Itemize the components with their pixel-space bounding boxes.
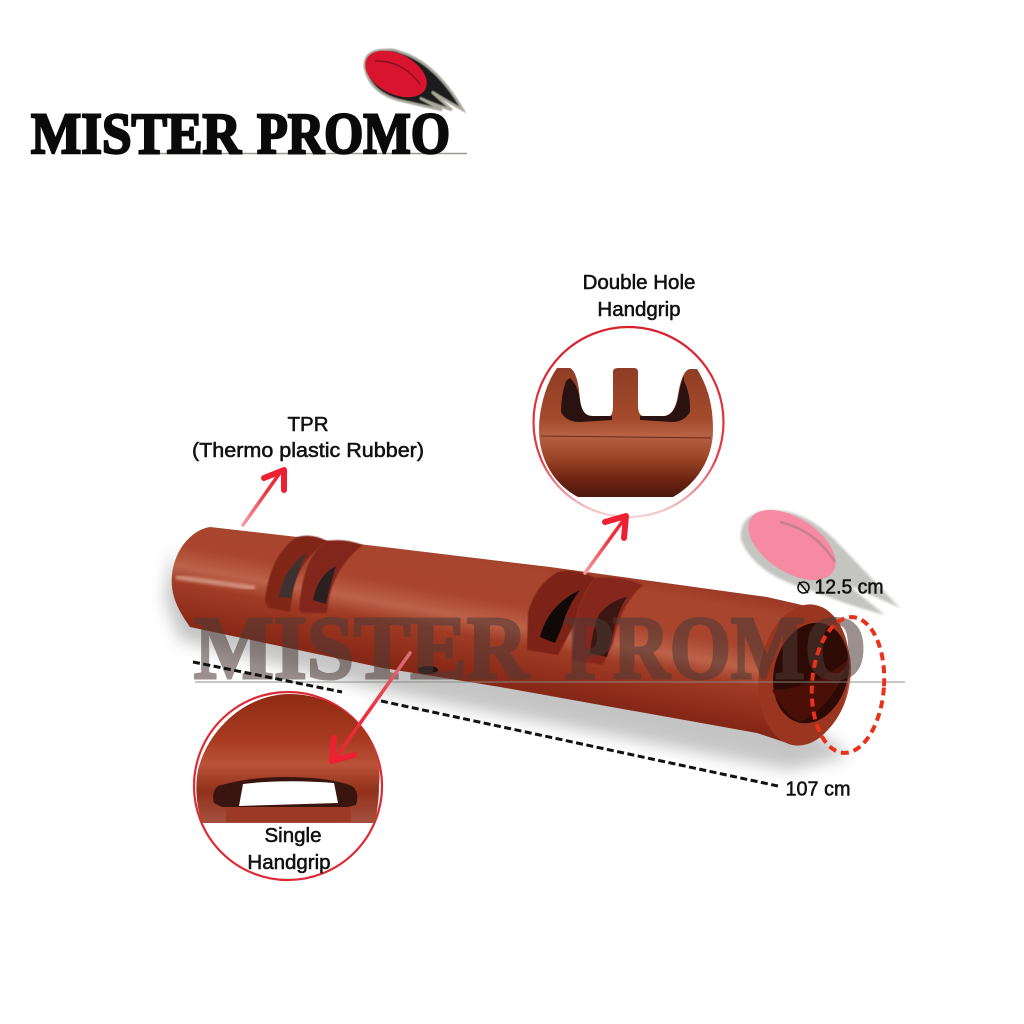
logo baseline <box>150 152 467 154</box>
label line 2: Handgrip <box>247 851 331 874</box>
hole shading left <box>561 378 612 422</box>
photo: single grip cut-out <box>196 694 380 823</box>
label line 2: (Thermo plastic Rubber) <box>192 439 424 462</box>
wordmark: Mister: MISTER <box>31 101 242 166</box>
tube shadow <box>165 550 850 770</box>
logo icon: red ball <box>358 41 463 110</box>
seam <box>541 436 711 438</box>
first pair of grips <box>265 536 363 613</box>
label: Double Hole <box>583 271 695 294</box>
watermark: Mister: MISTER <box>194 599 529 698</box>
logo wordmark <box>31 101 450 166</box>
watermark: Promo: PROMO <box>565 599 866 698</box>
arrow: to single handgrip <box>332 653 410 761</box>
label line 2: Handgrip <box>597 298 681 321</box>
watermark: Mister Promo <box>194 599 905 698</box>
photo: double hole cut-out <box>539 368 713 497</box>
circle ring <box>194 692 382 880</box>
arrow: to double hole handgrip <box>585 516 626 573</box>
tube underside bump <box>418 666 438 674</box>
tube opening ring <box>750 598 858 752</box>
label: Single <box>264 824 322 847</box>
diameter value: 12.5 cm <box>814 576 884 598</box>
label: TPR material <box>192 413 424 462</box>
tube opening hollow <box>763 615 859 731</box>
label line 1: TPR <box>288 413 328 436</box>
watermark baseline <box>195 681 905 683</box>
slot lip <box>226 807 351 822</box>
tube body <box>172 527 851 745</box>
watermark icon: ball <box>736 496 900 615</box>
product: rubber tube <box>172 527 859 752</box>
callout: double hole handgrip <box>534 271 724 517</box>
second pair of grips <box>527 571 643 665</box>
left end highlight <box>176 577 255 588</box>
slot recess <box>213 777 357 807</box>
logo: Mister Promo <box>31 41 467 166</box>
icon: diameter symbol <box>798 582 809 593</box>
hollow inner wall <box>772 660 848 722</box>
circle ring <box>534 327 724 517</box>
hole shading right <box>640 376 690 422</box>
callout: single handgrip <box>194 692 382 880</box>
label: length: 107 cm <box>786 778 850 800</box>
label: diameter <box>798 576 884 598</box>
diameter dashed ellipse <box>807 615 889 755</box>
wordmark: Promo: PROMO <box>257 101 450 166</box>
arrow: to TPR <box>243 470 284 525</box>
length dimension line <box>193 662 778 786</box>
slot opening <box>239 781 338 806</box>
